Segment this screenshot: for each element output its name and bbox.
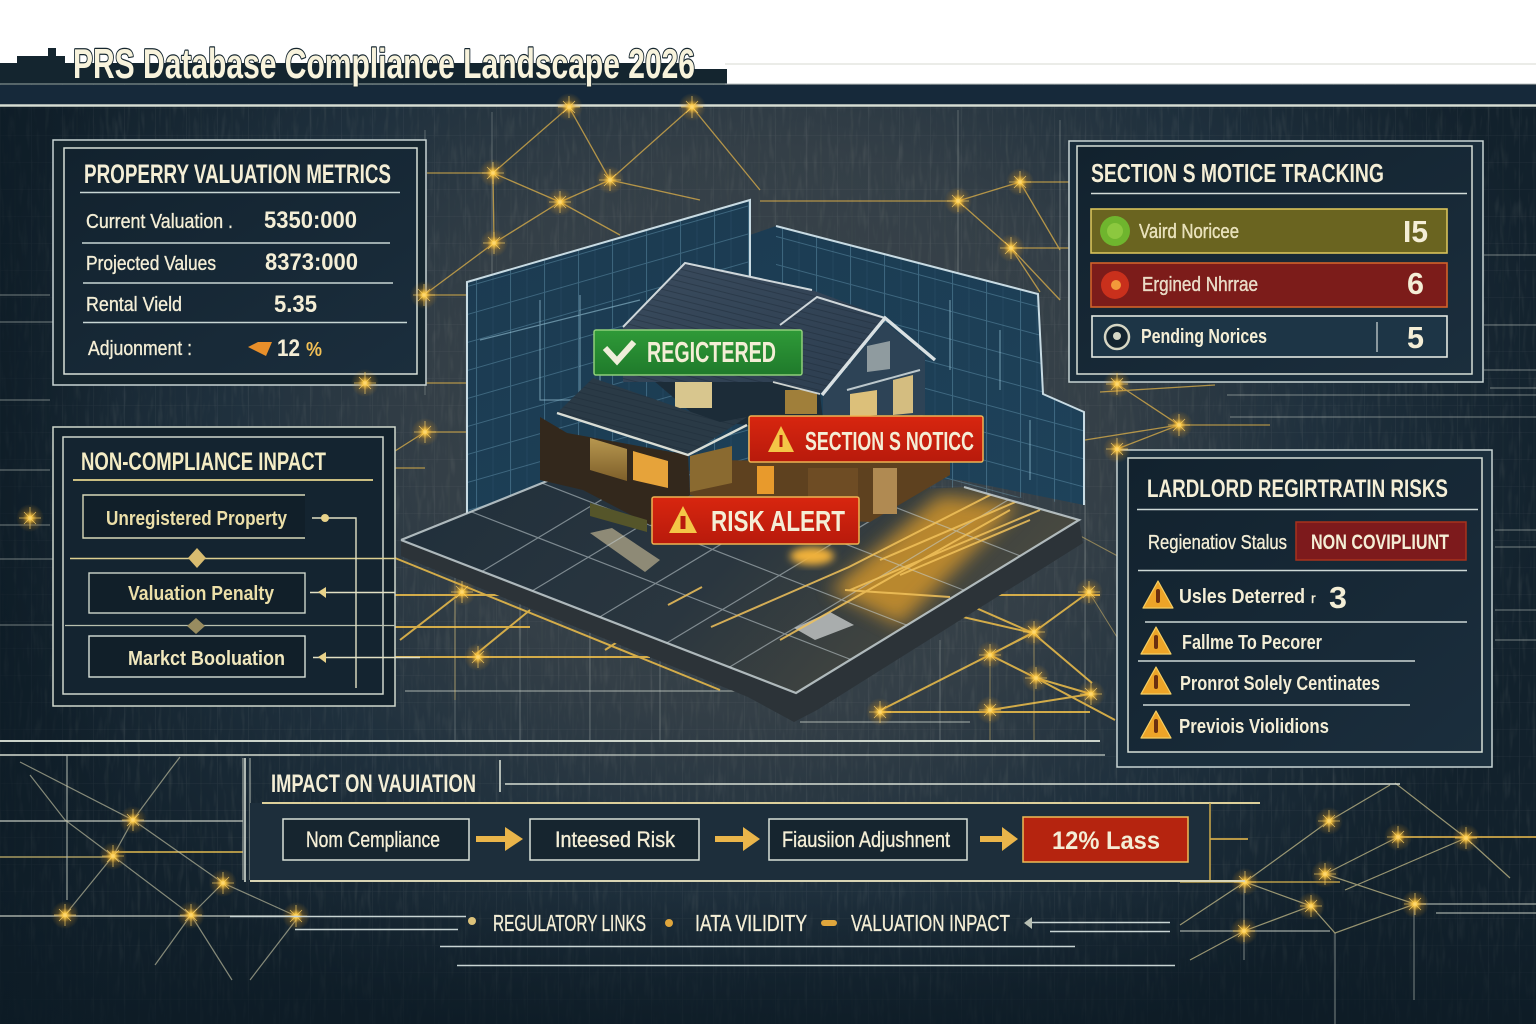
main roof: [623, 263, 935, 395]
panel: landlord registration risks: Regienatiov Stalus: [1148, 532, 1287, 554]
panel: property valuation metrics: 5350:000: [264, 207, 357, 234]
risk items: [1141, 580, 1380, 738]
panel: non-compliance impact: NON-COMPLIANCE INPACT: [81, 448, 326, 476]
box: valuation penalty: Valuation Penalty: [128, 583, 275, 605]
blueprint walls: [467, 200, 1084, 523]
panel: section notice tracking: SECTION S MOTICE TRACKING: [1091, 158, 1384, 188]
step: increased risk: Inteesed Risk: [555, 827, 676, 852]
risk items: r: [1311, 590, 1316, 606]
risk items: Usles Deterred: [1179, 586, 1305, 608]
panel: property valuation metrics: Current Valuation .: [86, 211, 233, 233]
row: pending notices: Pending Norices: [1141, 326, 1267, 348]
row: pending notices: 5: [1407, 320, 1424, 355]
status badge: section notice: [749, 416, 983, 462]
row: valid notices: Vaird Noricee: [1139, 221, 1239, 243]
step: non compliance: Nom Cempliance: [306, 827, 440, 852]
lower-right network: [1180, 783, 1536, 1024]
row: valid notices: I5: [1403, 214, 1428, 249]
status badge: risk alert: [652, 497, 859, 544]
risk items: 3: [1329, 580, 1347, 615]
panel: non-compliance impact: [53, 427, 420, 706]
arrow: [715, 827, 760, 851]
step: valuation adjustment: Fiausiion Adjushnent: [782, 827, 950, 852]
panel: section notice tracking: [1069, 141, 1483, 382]
step: increased risk: [530, 819, 699, 860]
structural frame lines: [0, 106, 1536, 755]
box: valuation penalty: [89, 573, 305, 613]
panel: landlord registration risks: [1117, 450, 1492, 767]
panel: property valuation metrics: 12: [277, 335, 300, 362]
panel: property valuation metrics: Adjuonment :: [88, 338, 192, 360]
heading: PROPERRY VALUATION METRICS: [84, 159, 391, 189]
row: expired notices: [1091, 263, 1447, 307]
panel: impact on valuation: [245, 758, 1400, 882]
panel: property valuation metrics: Rental Vield: [86, 294, 182, 316]
upper and middle nodes: [555, 93, 583, 121]
panel: property valuation metrics: Projected Values: [86, 253, 216, 275]
arrow: [980, 827, 1018, 851]
step: non compliance: [283, 819, 469, 860]
footer legend: IATA VILIDITY: [695, 910, 807, 936]
panel: property valuation metrics: %: [306, 339, 322, 361]
house body: [540, 322, 950, 525]
lower-left network: [0, 755, 300, 980]
footer legend: VALUATION INPACT: [851, 910, 1010, 936]
result: 12% loss: 12% Lass: [1052, 827, 1160, 855]
blueprint house illustration: [401, 200, 1084, 722]
title: PRS Database Compliance Landscape 2026: [73, 40, 695, 87]
box: market devaluation: [89, 636, 305, 677]
foreground network nodes: [351, 281, 1131, 606]
badge: non compliant: NON COVIPLIUNT: [1311, 531, 1449, 554]
connector arrows: [310, 514, 420, 688]
ground floor plan plate: [400, 481, 1083, 722]
footer legend: [230, 910, 1175, 966]
status badge: section notice: SECTION S NOTICC: [805, 426, 974, 456]
step: valuation adjustment: [769, 819, 967, 860]
row: pending notices: [1092, 316, 1447, 357]
arrow: [476, 827, 523, 851]
risk items: Fallme To Pecorer: [1182, 632, 1322, 654]
panel: property valuation metrics: 5.35: [274, 291, 317, 318]
row: expired notices: Ergined Nhrrae: [1142, 274, 1258, 296]
row: expired notices: 6: [1407, 266, 1424, 301]
footer legend: REGULATORY LINKS: [493, 910, 646, 936]
row: valid notices: [1091, 209, 1447, 253]
status badge: risk alert: RISK ALERT: [711, 506, 845, 538]
result: 12% loss: [1023, 817, 1188, 862]
panel: property valuation metrics: [53, 140, 426, 385]
box: market devaluation: Markct Booluation: [128, 648, 285, 670]
panel: property valuation metrics: 8373:000: [265, 249, 358, 276]
porch roof and lit windows: [557, 378, 897, 532]
status badge: registered: REGICTERED: [647, 337, 776, 369]
status badge: registered: [594, 330, 802, 375]
risk items: Pronrot Solely Centinates: [1180, 673, 1380, 695]
badge: non compliant: [1296, 522, 1466, 560]
risk items: Previois Violidions: [1179, 716, 1329, 738]
panel: landlord registration risks: LARDLORD REGIRTRATIN RISKS: [1147, 475, 1448, 503]
panel: impact on valuation: IMPACT ON VAUIATION: [271, 770, 476, 798]
box: unregistered property: [83, 495, 305, 538]
box: unregistered property: Unregistered Property: [106, 508, 288, 530]
